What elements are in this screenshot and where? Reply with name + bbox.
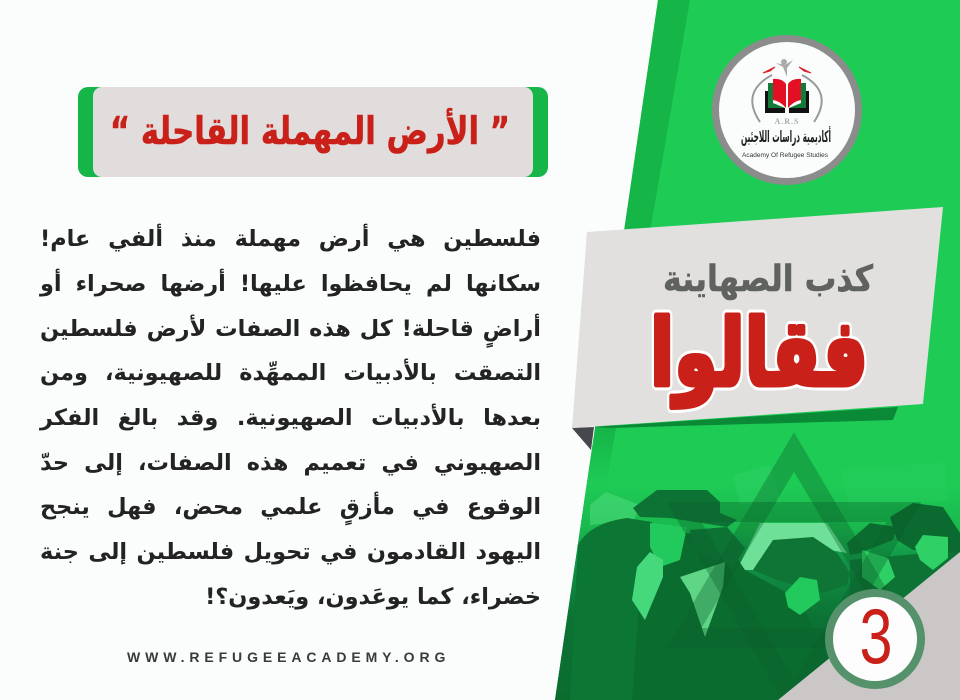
- heading inner panel: ” الأرض المهملة القاحلة “: [110, 109, 510, 153]
- banner title: فقالوا: [650, 300, 868, 408]
- banner fold: [572, 407, 898, 450]
- body text: خضراء، كما يوعَدون، ويَعدون؟!: [205, 584, 541, 610]
- main figure: [632, 533, 806, 700]
- body text: التصقت بالأدبيات الممهِّدة للصهيونية، ومن: [40, 360, 541, 386]
- body text: فلسطين هي أرض مهملة منذ ألفي عام!: [40, 226, 541, 252]
- heading box: [78, 87, 548, 177]
- green panel: [555, 0, 960, 700]
- icon: open book: [752, 59, 822, 122]
- number badge: 3: [860, 592, 892, 680]
- number badge: [825, 589, 925, 689]
- body text: [39, 224, 541, 610]
- banner: [572, 207, 943, 428]
- body text: سكانها لم يحافظوا عليها! أرضها صحراء أو: [40, 271, 541, 297]
- right side artwork: [555, 0, 960, 700]
- body text: أراضٍ قاحلة! كل هذه الصفات لأرض فلسطين: [40, 316, 541, 342]
- banner title: فقالوا: [650, 300, 868, 408]
- star of David: [684, 452, 904, 700]
- middle figure: [753, 537, 850, 593]
- logo: أكاديمية دراسات اللاجئين: [741, 126, 831, 146]
- body text: الوقوع في مأزقٍ علمي محض، فهل ينجح: [40, 494, 541, 520]
- website url: WWW.REFUGEEACADEMY.ORG: [127, 649, 450, 665]
- logo letters: A.R.S: [774, 117, 800, 126]
- body text: الصهيوني في تعميم هذه الصفات، إلى حدّ: [40, 450, 541, 476]
- logo: [712, 35, 862, 185]
- right figures: [849, 552, 958, 598]
- heading inner panel: [93, 87, 533, 177]
- light centre: [737, 523, 847, 570]
- photo of crowd with star: [555, 430, 960, 700]
- left figure: [570, 518, 654, 700]
- body text: اليهود القادمون في تحويل فلسطين إلى جنة: [40, 539, 541, 565]
- banner subtitle: كذب الصهاينة: [663, 259, 873, 300]
- body text: بعدها بالأدبيات الصهيونية. وقد بالغ الفكر: [40, 405, 541, 431]
- logo english name: Academy Of Refugee Studies: [742, 152, 829, 159]
- grey corner: [778, 552, 960, 700]
